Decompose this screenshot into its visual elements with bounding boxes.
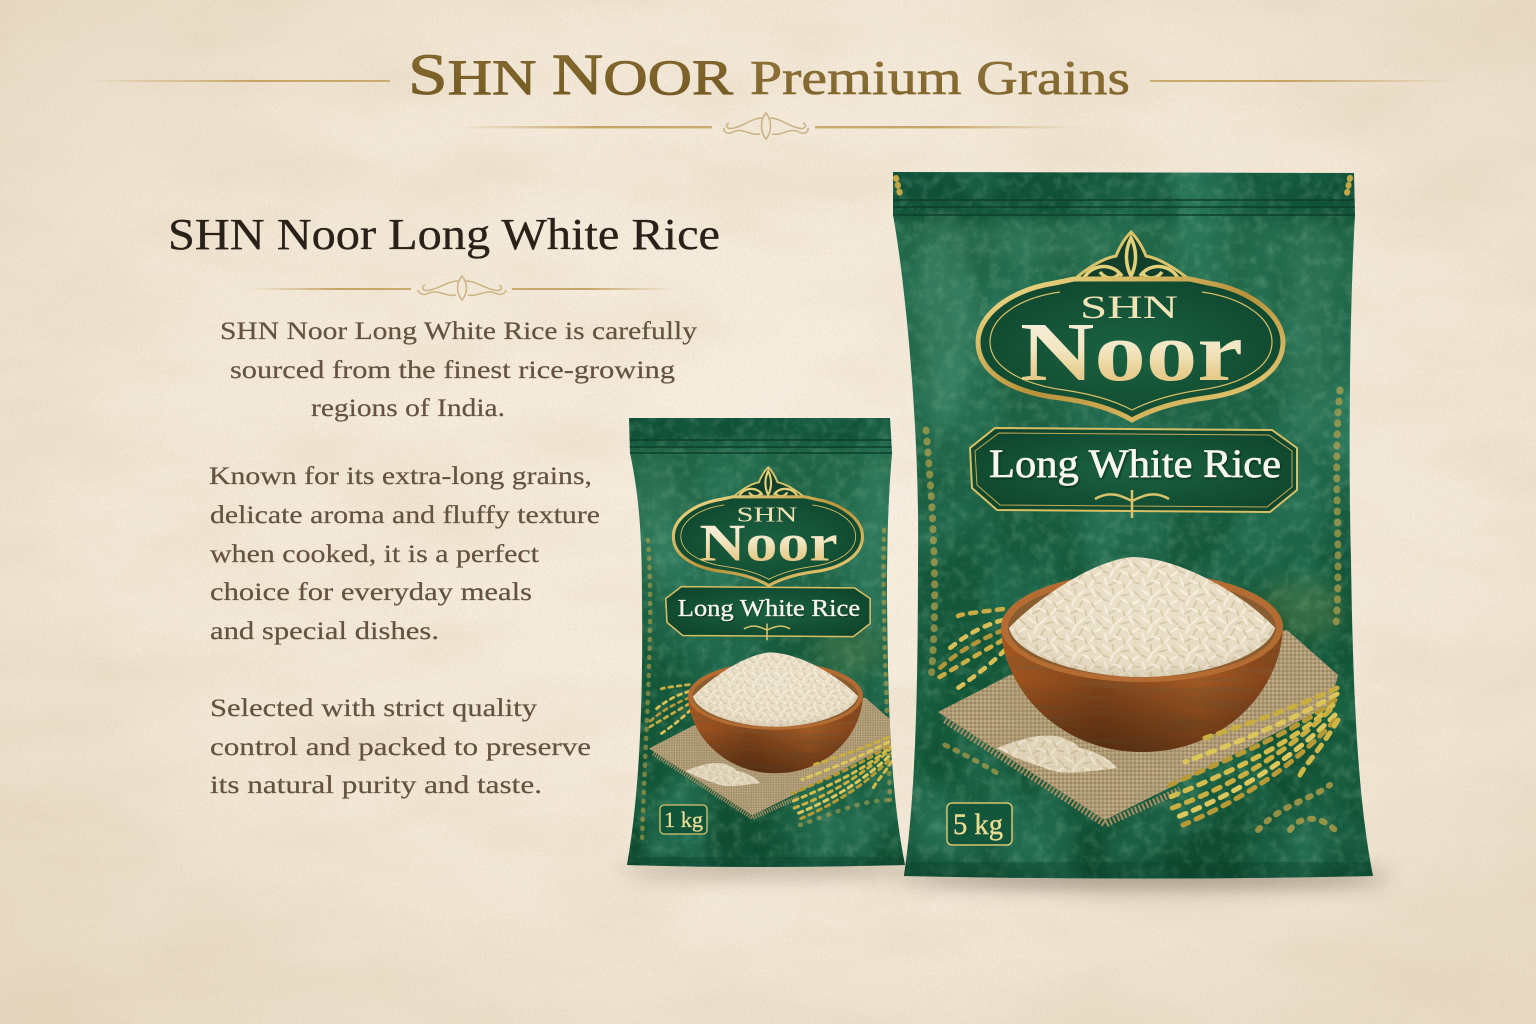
1 kg variety plate: Long White Rice [678, 595, 860, 622]
paragraph: sourcing [220, 318, 698, 422]
paragraph: grain qualities: and special dishes. [210, 618, 439, 645]
bowl [684, 652, 867, 775]
5 kg weight label [947, 803, 1012, 845]
bag shadows [620, 860, 1390, 888]
title text: premium grains: Premium Grains [750, 50, 1130, 105]
title [408, 42, 1130, 107]
paragraph: sourcing: SHN Noor Long White Rice is carefully [220, 318, 698, 345]
paragraph: quality control: its natural purity and taste. [210, 772, 542, 799]
paragraph: quality control: control and packed to preserve [210, 734, 591, 761]
product: 1 kg bag [620, 410, 915, 875]
5 kg logo badge: Noor [1020, 306, 1243, 399]
product: 5 kg bag [885, 165, 1380, 885]
title ornament divider [455, 113, 1083, 139]
1 kg logo badge [673, 467, 862, 586]
paragraph: grain qualities [209, 463, 600, 645]
5 kg logo badge [978, 232, 1283, 420]
burlap cloth [930, 625, 1340, 825]
paragraph: quality control: Selected with strict quality [210, 695, 538, 722]
paragraph: grain qualities: choice for everyday meals [210, 579, 532, 606]
paragraph: grain qualities: Known for its extra-long grains, [209, 463, 592, 490]
burlap cloth [644, 694, 898, 818]
loose rice [686, 763, 760, 786]
title side rules [85, 80, 1460, 82]
paragraph: sourcing: sourced from the finest rice-growing [230, 357, 676, 384]
left wheat [938, 609, 1005, 690]
1 kg bag body [620, 410, 915, 875]
title text: brand: SHN NOOR [408, 42, 734, 107]
paragraph: grain qualities: when cooked, it is a perfect [210, 541, 539, 568]
product heading: SHN Noor Long White Rice [168, 210, 720, 259]
bowl [995, 557, 1290, 755]
1 kg variety plate [666, 587, 870, 640]
paragraph: grain qualities: delicate aroma and fluffy texture [210, 502, 600, 529]
5 kg logo badge: SHN [1080, 290, 1178, 326]
5 kg weight label: 5 kg [953, 808, 1003, 841]
1 kg logo badge: SHN [737, 504, 798, 526]
paragraph: sourcing: regions of India. [311, 395, 505, 422]
5 kg variety plate [970, 428, 1297, 518]
right wheat [791, 734, 897, 818]
5 kg rice bowl scene [930, 557, 1340, 825]
1 kg weight label: 1 kg [664, 807, 703, 832]
5 kg bag body [885, 165, 1380, 885]
right wheat [1167, 688, 1338, 825]
left wheat [649, 685, 690, 735]
heading ornament divider [248, 276, 677, 300]
1 kg logo badge: Noor [699, 514, 838, 572]
paragraph: quality control [210, 695, 591, 799]
loose rice [997, 735, 1117, 773]
1 kg rice bowl scene [644, 652, 898, 818]
5 kg variety plate: Long White Rice [989, 441, 1281, 486]
body text [209, 318, 698, 799]
